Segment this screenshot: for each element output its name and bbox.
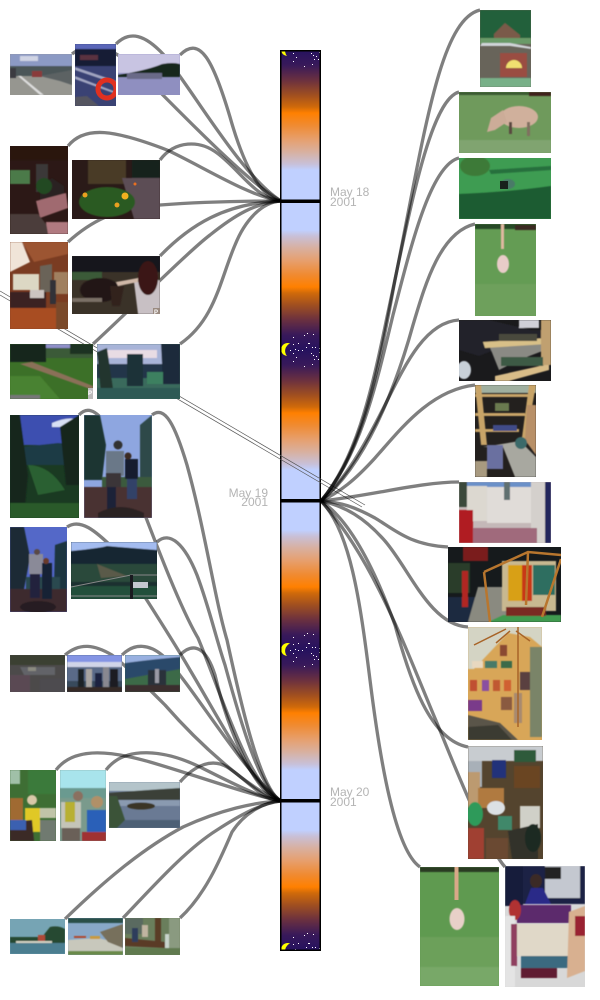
photo: lake island <box>109 782 180 828</box>
photo: valley view <box>10 415 79 518</box>
photo: porch with bench <box>10 146 68 234</box>
photo: sheep grazing <box>459 92 551 153</box>
photo: dark sheep in field <box>459 158 551 219</box>
date label May 20: May 20 <box>330 785 369 799</box>
connectors May 19 <box>321 10 505 867</box>
connectors May 20 <box>56 410 281 919</box>
photo: group with ridge <box>67 655 122 692</box>
photo: art stall <box>459 482 551 543</box>
date label May 19: May 19 <box>229 486 268 500</box>
photo: kayakers in life vests <box>60 770 106 841</box>
stars and moon: midnight May 21 <box>282 933 320 950</box>
photo: couple on rock <box>84 415 152 518</box>
photo: couple with trees <box>10 527 67 612</box>
photo: meadow with path: P <box>88 391 92 397</box>
photo: mountain and fence <box>71 542 157 599</box>
photo: pottery stall <box>475 385 536 477</box>
photo: pottery shelves <box>459 320 551 381</box>
timeline bar <box>280 33 321 967</box>
photo: sheep and post large <box>420 867 499 986</box>
photo: meadow and sea view <box>97 344 180 399</box>
connectors May 18 <box>68 36 281 344</box>
photo: group on tree <box>125 918 180 955</box>
photo: market stall with pots <box>468 746 543 859</box>
photo: barn with sign <box>480 10 531 87</box>
photo: rocky shore <box>10 655 65 692</box>
date label May 18: May 18 <box>330 185 369 199</box>
photo: girl petting donkey: P <box>154 310 158 316</box>
photo: girl petting donkey <box>72 256 160 316</box>
date label May 20: 2001 <box>330 795 357 809</box>
photo: sheep and post <box>475 224 536 316</box>
connector thin double line <box>0 291 365 507</box>
stars and moon: midnight May 18 <box>282 52 320 67</box>
date label May 18: 2001 <box>330 195 357 209</box>
photo: ferry deck with lifebuoy <box>75 44 116 106</box>
stars and moon: midnight May 20 <box>281 633 320 667</box>
photo: beach kayaks <box>68 918 123 955</box>
photo: book display <box>468 627 542 740</box>
photo: lighthouse shore <box>10 919 65 954</box>
photo: ferry line cars <box>10 54 72 95</box>
photo: meadow with path <box>10 344 93 399</box>
date label May 19: 2001 <box>241 495 268 509</box>
stars and moon: midnight May 19 <box>281 333 320 367</box>
photo: lodge interior <box>10 242 68 329</box>
photo: group at valley <box>125 655 180 692</box>
photo: ferry on water <box>118 54 180 95</box>
photo: garden art stand <box>448 547 561 622</box>
photo: porch flowers <box>72 160 160 219</box>
photo: weaver with blankets <box>505 866 585 987</box>
photo: kayaker in yellow vest <box>10 770 56 841</box>
